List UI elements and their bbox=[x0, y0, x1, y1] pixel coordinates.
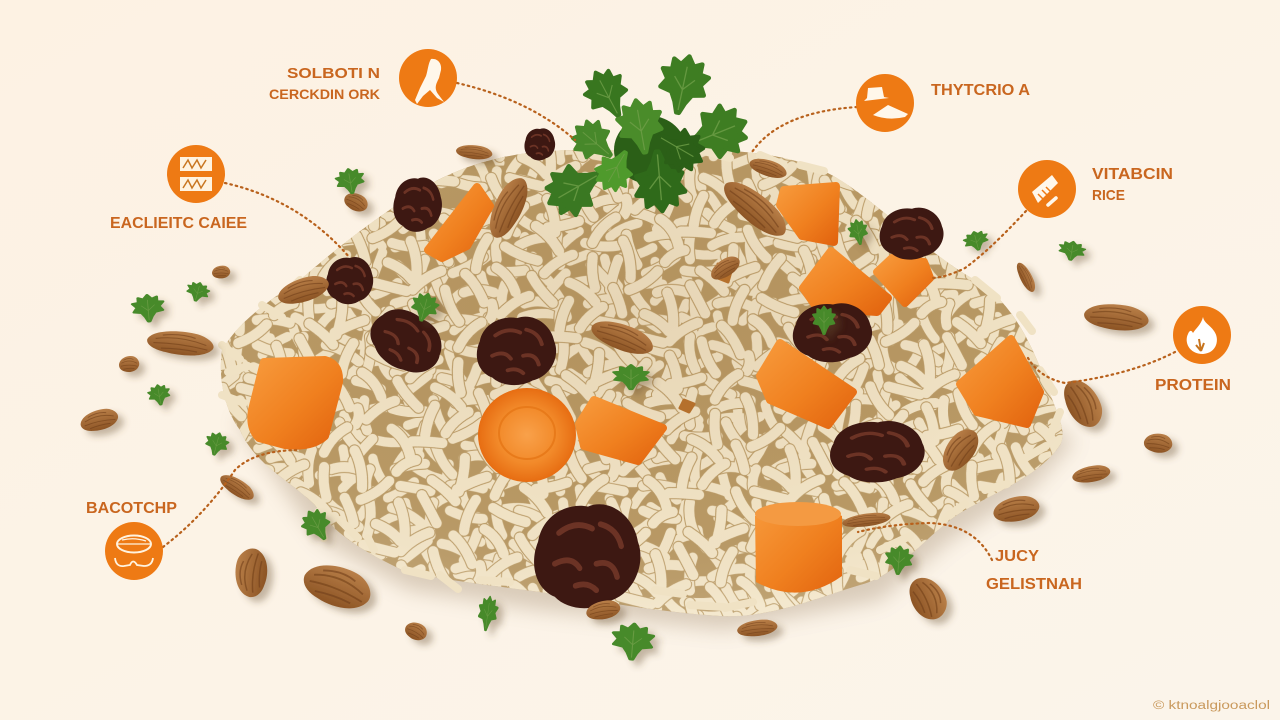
callout: eaclieitc bbox=[110, 145, 247, 232]
carrot: right chunk bbox=[760, 343, 853, 425]
carrot: far right chunk bbox=[960, 339, 1040, 424]
carrot: cylinder bbox=[755, 502, 842, 593]
icon: hat and rice bbox=[856, 74, 914, 132]
callout: bacotchp bbox=[86, 500, 177, 580]
icon: grain panels bbox=[167, 145, 225, 203]
label: SOLBOTI N bbox=[287, 65, 380, 82]
parsley garnish bbox=[538, 52, 754, 223]
carrot pieces bbox=[251, 186, 1040, 593]
scattered almonds bbox=[78, 143, 1174, 644]
carrot: round slice bbox=[478, 388, 576, 482]
callout: thytcrio bbox=[856, 74, 1030, 132]
icon: grain bar bbox=[1018, 160, 1076, 218]
raisins bbox=[326, 128, 944, 608]
callout: jucy bbox=[986, 548, 1082, 593]
carrot: edge chunk bbox=[877, 258, 930, 303]
carrot: upper right chunk bbox=[803, 251, 888, 312]
label: EACLIEITC CAIEE bbox=[110, 215, 247, 232]
rice mound bbox=[221, 150, 1075, 630]
carrot: left chunk bbox=[251, 360, 339, 446]
sub label: RICE bbox=[1092, 187, 1125, 204]
dotted connector lines bbox=[163, 83, 1175, 560]
icon: seed and waves bbox=[105, 522, 163, 580]
scattered herb leaves bbox=[132, 167, 1086, 661]
callout: protein bbox=[1155, 306, 1231, 394]
sub label: CERCKDIN ORK bbox=[269, 87, 380, 102]
icon: figure bbox=[399, 49, 457, 107]
carrot: upper left chunk bbox=[428, 187, 490, 258]
callout: vitamin rice bbox=[1018, 160, 1173, 218]
carrot: top chunk bbox=[780, 186, 836, 242]
copyright note: © ktnoalgjooaclol bbox=[1153, 700, 1270, 712]
label: VITABCIN bbox=[1092, 166, 1173, 183]
callout: solbotin bbox=[269, 49, 457, 107]
sub label: GELISTNAH bbox=[986, 576, 1082, 593]
label: BACOTCHP bbox=[86, 500, 177, 517]
label: THYTCRIO A bbox=[931, 82, 1030, 99]
label: PROTEIN bbox=[1155, 377, 1231, 394]
carrot: centre chunk bbox=[579, 400, 663, 461]
almonds on the rice bbox=[275, 154, 986, 529]
label: JUCY bbox=[995, 548, 1040, 565]
icon: flame bbox=[1173, 306, 1231, 364]
